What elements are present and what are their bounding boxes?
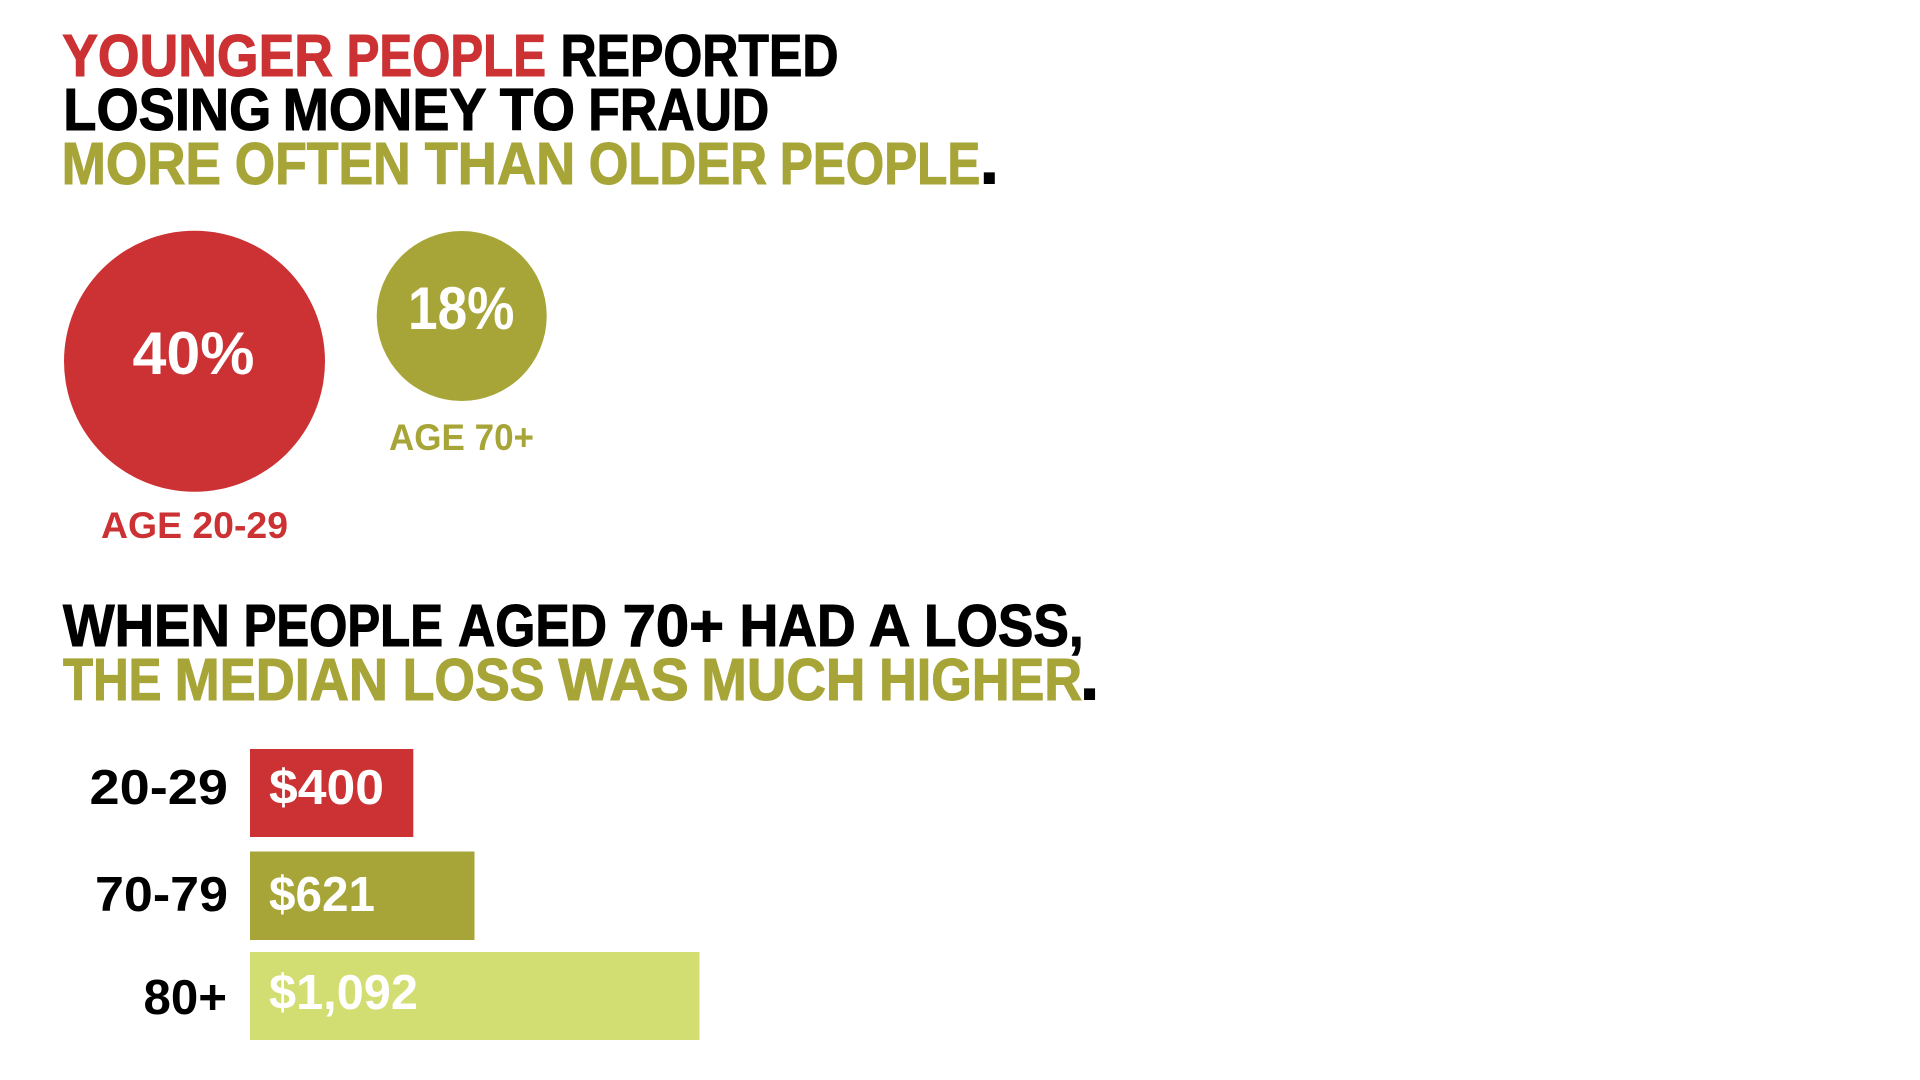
heading: median loss higher for people aged 70+: 70+: [623, 592, 724, 659]
heading: median loss higher for people aged 70+: MUCH: [701, 646, 866, 713]
bar row: 20-29: $400: [269, 761, 384, 815]
bar row: 20-29: [90, 749, 413, 837]
heading: median loss higher for people aged 70+: HIGHER: [879, 646, 1082, 713]
title: younger people lose money more often: OFTEN: [235, 130, 411, 197]
heading: median loss higher for people aged 70+: LOSS: [403, 646, 544, 713]
bar row: 70-79: $621: [269, 868, 375, 922]
title: younger people lose money more often: TO: [500, 76, 575, 143]
circle stat: age 70+: AGE 70+: [389, 416, 534, 458]
bar row: 80+: 80+: [144, 971, 227, 1025]
title: younger people lose money more often: FRAUD: [588, 76, 769, 143]
circle stat: age 20-29: [64, 231, 325, 546]
heading: median loss higher for people aged 70+: AGED: [458, 592, 607, 659]
bar row: 80+: [144, 952, 700, 1040]
heading: median loss higher for people aged 70+: [63, 592, 1100, 717]
title: younger people lose money more often: YOUNGER: [62, 22, 333, 89]
heading: median loss higher for people aged 70+: LOSS,: [924, 592, 1084, 659]
title: younger people lose money more often: PEOPLE: [780, 130, 980, 197]
heading: median loss higher for people aged 70+: WAS: [558, 646, 689, 713]
bar row: 70-79: [95, 852, 474, 940]
heading: median loss higher for people aged 70+: .: [1079, 629, 1100, 717]
title: younger people lose money more often: [62, 22, 1000, 201]
heading: median loss higher for people aged 70+: MEDIAN: [175, 646, 388, 713]
heading: median loss higher for people aged 70+: HAD: [740, 592, 856, 659]
bar row: 20-29: 20-29: [90, 761, 228, 815]
title: younger people lose money more often: REPORTED: [560, 22, 838, 89]
circle stat: age 70+: 18%: [408, 275, 514, 342]
title: younger people lose money more often: PEOPLE: [347, 22, 546, 89]
title: younger people lose money more often: MONEY: [283, 76, 486, 143]
bar row: 70-79: 70-79: [95, 868, 228, 922]
heading: median loss higher for people aged 70+: PEOPLE: [244, 592, 443, 659]
circle stat: age 70+: [377, 231, 547, 458]
heading: median loss higher for people aged 70+: WHEN: [63, 592, 230, 659]
title: younger people lose money more often: .: [978, 113, 1000, 201]
bar row: 80+: $1,092: [269, 966, 418, 1020]
title: younger people lose money more often: MORE: [62, 130, 221, 197]
circle stat: age 20-29: 40%: [132, 320, 254, 387]
title: younger people lose money more often: LOSING: [63, 76, 271, 143]
heading: median loss higher for people aged 70+: THE: [63, 646, 162, 713]
title: younger people lose money more often: OLDER: [589, 130, 767, 197]
heading: median loss higher for people aged 70+: A: [869, 592, 910, 659]
title: younger people lose money more often: THAN: [425, 130, 575, 197]
circle stat: age 20-29: AGE 20-29: [101, 504, 288, 546]
bar chart: median loss by age: [90, 749, 700, 1040]
